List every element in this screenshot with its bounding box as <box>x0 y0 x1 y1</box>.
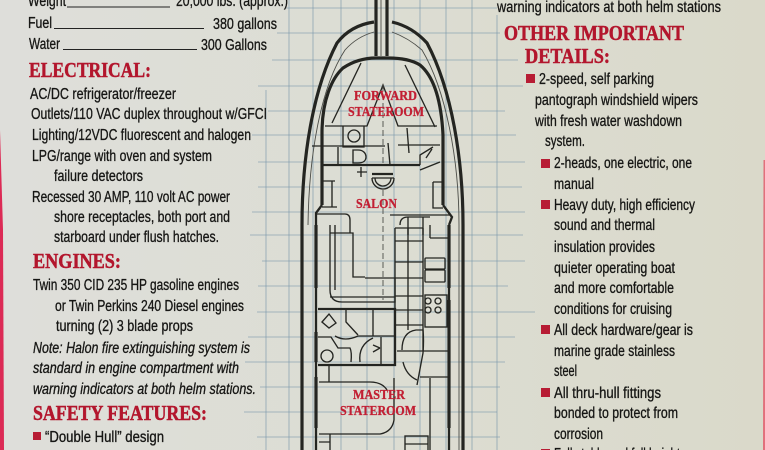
forward stateroom layout <box>312 63 440 170</box>
heading: safety features: SAFETY FEATURES: <box>33 401 207 425</box>
master stateroom layout <box>319 365 428 450</box>
list item: thru-hull fittings <box>541 385 678 443</box>
list item: deck hardware: All deck hardware/gear is <box>554 322 693 339</box>
text block: electrical details: shore receptacles, both port and <box>54 209 230 226</box>
note: halon fire system: standard in engine compartment with <box>33 360 239 377</box>
list item: insulation: insulation provides <box>554 239 655 256</box>
list item: heads: manual <box>554 176 594 193</box>
list item: insulation: and more comfortable <box>554 280 674 297</box>
heads layout <box>318 309 395 365</box>
door swings <box>397 330 449 450</box>
text block: engine details <box>33 277 244 335</box>
list item: thru-hull fittings: All thru-hull fittings <box>554 385 661 402</box>
list item: thru-hull fittings: corrosion <box>554 426 603 443</box>
list item: windshield wipers: 2-speed, self parking <box>539 71 654 88</box>
floor plan drawing <box>302 0 463 450</box>
spec: water: 300 Gallons <box>201 37 267 54</box>
room labels: MASTER <box>353 388 406 403</box>
list item: windshield wipers <box>526 71 698 150</box>
room labels <box>340 89 424 419</box>
heading: electrical: ELECTRICAL: <box>29 58 151 82</box>
room labels: FORWARD <box>354 89 417 104</box>
text block: engine details: or Twin Perkins 240 Diesel engines <box>55 298 244 315</box>
stairs and galley <box>395 225 449 351</box>
list item: heads: 2-heads, one electric, one <box>554 155 692 172</box>
text block: electrical details: starboard under flush hatches. <box>54 229 219 246</box>
list item: deck hardware: steel <box>554 363 577 380</box>
panel: tank and weight specifications <box>28 0 288 54</box>
list item: insulation <box>541 197 695 318</box>
spec: fuel <box>28 15 277 33</box>
list item: windshield wipers: with fresh water washdown <box>534 113 682 130</box>
room labels: SALON <box>356 197 397 212</box>
room labels: STATEROOM <box>340 404 416 419</box>
note: halon fire system <box>33 340 256 398</box>
list item: thru-hull fittings: bonded to protect from <box>554 405 678 422</box>
heading: other important details: OTHER IMPORTANT <box>504 21 684 45</box>
text block: engine details: Twin 350 CID 235 HP gasoline engines <box>33 277 239 294</box>
heading: other important details: DETAILS: <box>525 44 610 68</box>
list item: insulation: conditions for cruising <box>554 301 672 318</box>
text block: electrical details: Recessed 30 AMP, 110 volt AC power <box>32 189 230 206</box>
spec: water: Water <box>29 36 60 53</box>
hull outline <box>302 0 463 450</box>
list item: deck hardware <box>541 322 693 380</box>
list item: insulation: quieter operating boat <box>554 260 676 277</box>
list item: insulation: sound and thermal <box>554 217 655 234</box>
salon layout <box>317 167 450 302</box>
spec: fuel: Fuel <box>28 15 52 32</box>
list item: deck hardware: marine grade stainless <box>554 343 675 360</box>
list item: windshield wipers: system. <box>545 133 585 150</box>
text block: electrical details: LPG/range with oven and system <box>32 148 212 165</box>
heading: engines: ENGINES: <box>33 249 121 273</box>
note: halon fire system: Note: Halon fire extinguishing system is <box>33 340 250 357</box>
list item: cut off at the bottom edge <box>541 446 681 450</box>
text block: electrical details: AC/DC refrigerator/freezer <box>30 86 176 103</box>
spec: weight <box>28 0 288 10</box>
heading: other important details <box>504 21 684 68</box>
note: halon fire system: warning indicators at both helm stations. <box>33 381 256 398</box>
text block: engine details: turning (2) 3 blade props <box>56 318 193 335</box>
text block: electrical details: Outlets/110 VAC duplex throughout w/GFCI <box>31 106 267 123</box>
room labels: STATEROOM <box>348 105 424 120</box>
spec: fuel: 380 gallons <box>213 16 277 33</box>
list item: windshield wipers: pantograph windshield wipers <box>535 92 698 109</box>
text block: electrical details: failure detectors <box>54 168 143 185</box>
text block: electrical details <box>30 86 267 246</box>
safety item: double hull: “Double Hull” design <box>45 429 164 446</box>
spec: water <box>29 36 267 54</box>
list item: insulation: Heavy duty, high efficiency <box>554 197 695 214</box>
text block: electrical details: Lighting/12VDC fluorescent and halogen <box>32 127 251 144</box>
list item: heads <box>541 155 692 193</box>
